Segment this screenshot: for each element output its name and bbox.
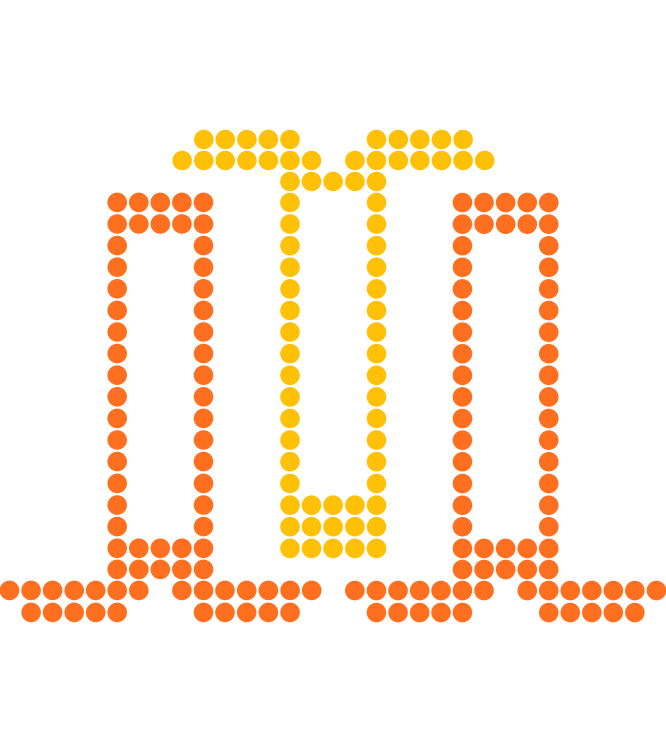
orange right bottom block: [453, 539, 559, 579]
orange right foot, inner: [345, 581, 494, 622]
orange right figure: [345, 193, 666, 622]
yellow top bar: [280, 172, 386, 191]
yellow left column: [280, 193, 300, 493]
orange left figure: [0, 193, 322, 622]
orange right outer column: [539, 236, 559, 537]
orange right inner column: [453, 236, 472, 537]
yellow base block: [280, 495, 386, 558]
orange left top block: [107, 193, 213, 234]
orange right top block: [453, 193, 559, 234]
orange left foot, outer: [0, 581, 149, 622]
yellow central figure: [172, 130, 495, 558]
yellow top left wing: [172, 130, 321, 170]
orange left inner column: [194, 236, 213, 536]
orange left outer column: [107, 236, 127, 536]
orange right foot, outer: [517, 581, 666, 622]
orange left bottom block: [107, 538, 213, 579]
yellow right column: [367, 193, 386, 493]
yellow top right wing: [345, 130, 495, 170]
orange left foot, inner: [172, 581, 322, 622]
